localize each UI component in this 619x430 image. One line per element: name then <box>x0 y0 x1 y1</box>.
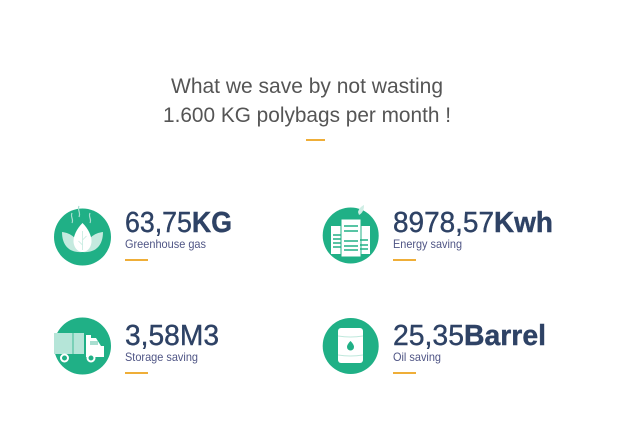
title: 1.600 KG polybags per month ! <box>163 104 451 127</box>
underline <box>125 372 148 374</box>
stat: greenhouse gas <box>54 206 232 266</box>
title <box>163 75 451 127</box>
icon: oil barrel <box>323 318 379 374</box>
underline <box>393 259 416 261</box>
title underline <box>306 139 325 141</box>
label: Greenhouse gas <box>125 237 206 251</box>
stat: energy saving <box>323 205 553 264</box>
label: Storage saving <box>125 350 198 364</box>
underline <box>393 372 416 374</box>
label: Energy saving <box>393 237 462 251</box>
value: 8978,57Kwh <box>393 207 553 239</box>
underline <box>125 259 148 261</box>
icon: batteries <box>323 205 379 264</box>
icon: truck <box>54 318 111 374</box>
title: What we save by not wasting <box>171 75 443 98</box>
value: 3,58M3 <box>125 320 219 352</box>
value: 25,35Barrel <box>393 320 546 352</box>
stat: storage saving <box>54 318 219 374</box>
icon: leaf with steam <box>54 206 111 266</box>
stat: oil saving <box>323 318 546 374</box>
value: 63,75KG <box>125 207 232 239</box>
label: Oil saving <box>393 350 441 364</box>
